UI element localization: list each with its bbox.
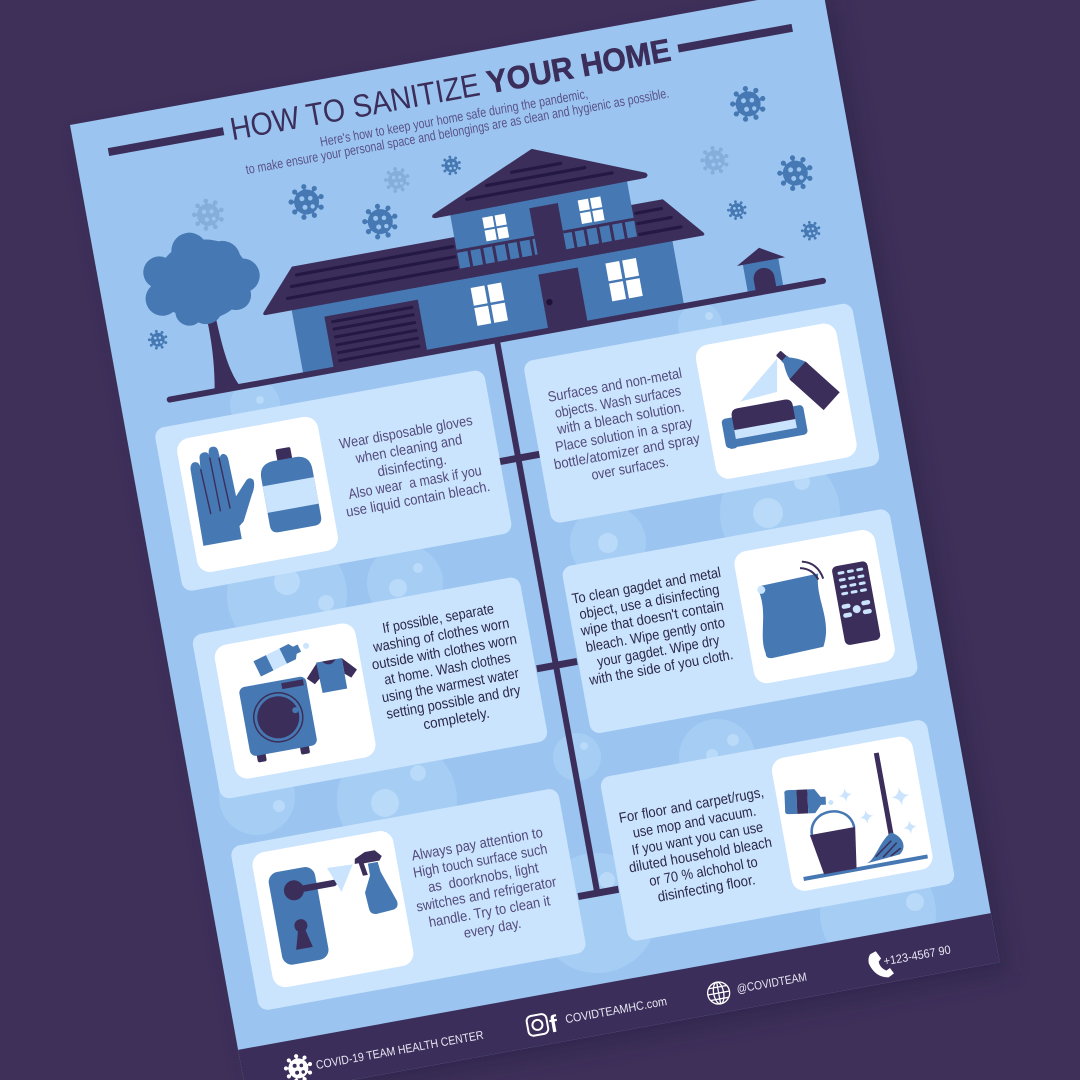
icon: detergent bottle: [253, 636, 312, 677]
text: laundry: setting possible and dry: [385, 683, 522, 723]
text: high-touch surfaces: as doorknobs, light: [427, 860, 540, 896]
icon: spray can: [770, 344, 840, 410]
text: surfaces: Place solution in a spray: [554, 415, 694, 456]
icon: washing machine: [238, 676, 319, 764]
text: high-touch surfaces: handle. Try to clean it: [428, 893, 551, 931]
panel: high-touch surfaces: [230, 788, 587, 1011]
ground line: [170, 281, 823, 400]
text: surfaces: with a bleach solution.: [555, 399, 686, 438]
text: gadgets: with the side of you cloth.: [587, 647, 735, 689]
window: lower right: [605, 258, 643, 301]
text: gadgets: [571, 565, 737, 689]
icon: facebook: f: [547, 1010, 561, 1039]
text: gloves: disinfecting.: [376, 452, 448, 480]
text: high-touch surfaces: Always pay attention to: [410, 825, 544, 865]
text: gloves: Also wear a mask if you: [347, 463, 483, 503]
text: high-touch surfaces: switches and refrigerator: [415, 874, 558, 916]
icon: t-shirt: [304, 656, 360, 695]
text: laundry: at home. Wash clothes: [383, 650, 512, 689]
icon: phone: [867, 949, 895, 980]
icon: bucket: [806, 808, 862, 875]
icon: sparkles: [837, 777, 918, 846]
panel: gadgets: [561, 508, 919, 735]
panel: gloves: [154, 369, 513, 592]
icon: instagram: [526, 1013, 549, 1037]
panel: floors: [599, 719, 956, 942]
text: floors: diluted household bleach: [628, 835, 773, 876]
text: laundry: using the warmest water: [381, 666, 520, 706]
title: YOUR HOME: [484, 32, 673, 100]
virus particles: [122, 77, 826, 361]
text: high-touch surfaces: [406, 824, 564, 949]
icon: cloth: [750, 558, 836, 659]
text: surfaces: bottle/atomizer and spray: [553, 431, 702, 473]
text: gadgets: wipe that doesn't contain: [579, 598, 725, 640]
text: floors: If you want you can use: [631, 820, 764, 859]
icon: spray triangle: [327, 863, 357, 894]
text: surfaces: Surfaces and non-metal: [547, 366, 683, 406]
title: [105, 10, 795, 169]
panel: surfaces: [523, 302, 881, 524]
text: high-touch surfaces: High touch surface such: [412, 841, 549, 882]
window: upper right: [578, 196, 605, 224]
subtitle: to make ensure your personal space and belongings are as clean and hygienic as possible.: [244, 86, 670, 177]
subtitle: Here's how to keep your home safe during the pandemic,: [319, 86, 589, 149]
text: gadgets: bleach. Wipe gently onto: [585, 615, 726, 656]
text: laundry: [365, 598, 530, 740]
text: organisation: COVID-19 TEAM HEALTH CENTER: [315, 1028, 485, 1072]
central timeline: [478, 336, 619, 900]
panel: laundry: [191, 576, 549, 800]
text: gadgets: your gagdet. Wipe dry: [596, 633, 721, 671]
text: gadgets: To clean gagdet and metal: [571, 565, 722, 608]
text: gloves: when cleaning and: [354, 432, 464, 467]
text: high-touch surfaces: every day.: [463, 916, 523, 942]
text: laundry: If possible, separate: [381, 601, 495, 637]
window: lower left: [471, 282, 508, 326]
front door: [538, 268, 587, 329]
icon: spray mist: [734, 358, 784, 402]
text: handle: @COVIDTEAM: [736, 970, 808, 996]
text: floors: For floor and carpet/rugs,: [618, 785, 765, 827]
text: floors: or 70 % alchohol to: [648, 855, 759, 890]
icon: mop: [848, 751, 906, 863]
text: phone number: +123-4567 90: [882, 942, 952, 968]
footer: [238, 913, 1000, 1080]
icon: footer virus: [281, 1052, 315, 1080]
text: gadgets: object, use a disinfecting: [578, 582, 721, 623]
text: floors: [618, 785, 780, 910]
house: [243, 121, 716, 378]
text: gloves: [333, 412, 491, 521]
text: floors: disinfecting floor.: [656, 872, 757, 906]
text: floors: use mop and vacuum.: [632, 804, 757, 842]
text: laundry: outside with clothes worn: [371, 632, 518, 674]
icon: door handle: [267, 862, 347, 966]
tree: [135, 221, 279, 399]
icon: sofa: [720, 397, 808, 450]
window: upper left: [482, 214, 509, 241]
text: gloves: use liquid contain bleach.: [345, 479, 491, 521]
title: HOW TO SANITIZE: [227, 66, 483, 147]
text: website: COVIDTEAMHC.com: [564, 994, 668, 1026]
text: surfaces: [541, 365, 705, 490]
icon: floor: [803, 854, 928, 881]
icon: bleach bottle: [257, 444, 322, 534]
doghouse: [734, 243, 790, 294]
text: laundry: washing of clothes worn: [371, 616, 511, 656]
text: gloves: Wear disposable gloves: [338, 413, 474, 453]
icon: remote control: [831, 561, 881, 646]
icon: glove: [186, 441, 264, 546]
icon: globe: [706, 980, 731, 1006]
garage door: [324, 300, 427, 368]
icon: spray bottle: [353, 848, 399, 916]
text: surfaces: objects. Wash surfaces: [554, 383, 682, 422]
icon: cleaner bottle: [784, 788, 834, 814]
text: laundry: completely.: [422, 706, 491, 733]
text: surfaces: over surfaces.: [590, 454, 670, 484]
